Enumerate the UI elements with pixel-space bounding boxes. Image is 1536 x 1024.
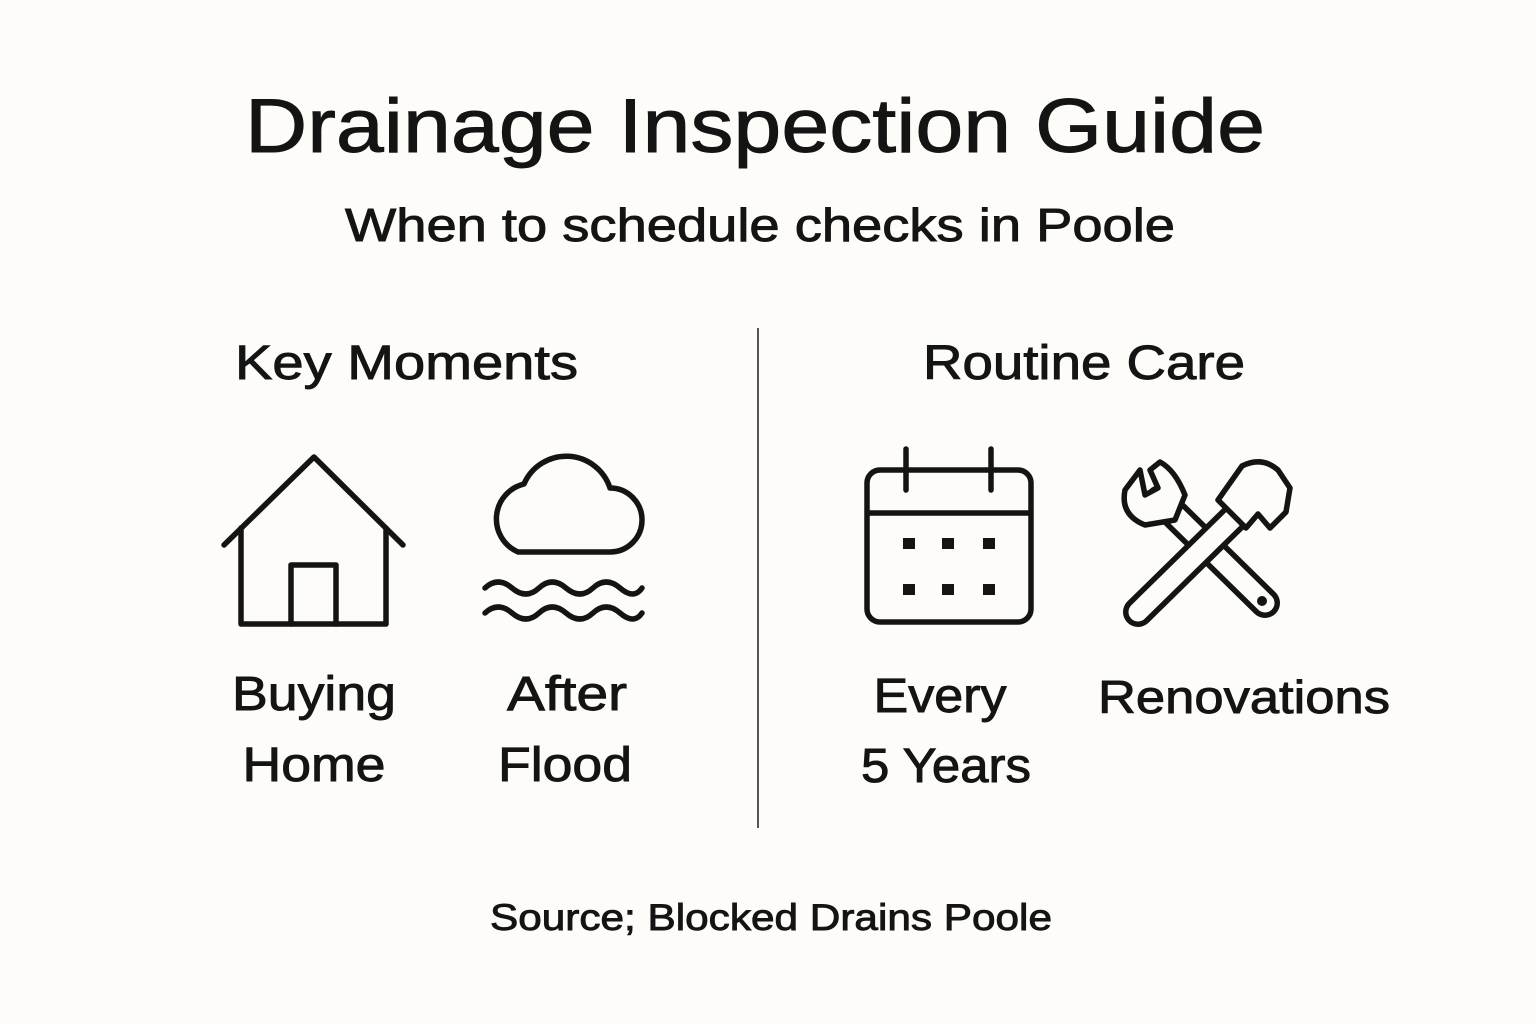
label: buying home: Home	[242, 739, 386, 792]
label: every 5 years	[861, 670, 1031, 793]
subtitle: When to schedule checks in Poole	[345, 199, 1175, 251]
label: renovations: Renovations	[1098, 671, 1390, 723]
title: Drainage Inspection Guide	[245, 84, 1265, 169]
source: Source; Blocked Drains Poole	[490, 897, 1052, 938]
label: after flood: After	[507, 668, 627, 721]
label: every 5 years: Every	[874, 670, 1006, 723]
heading: key moments: Key Moments	[235, 337, 578, 390]
label: every 5 years: 5 Years	[861, 740, 1031, 793]
icon: house	[224, 457, 403, 624]
icon: wrench and hammer	[1124, 462, 1290, 612]
heading: routine care: Routine Care	[923, 337, 1245, 390]
icon: calendar	[867, 449, 1031, 622]
icon: cloud and flood waves	[485, 456, 642, 619]
label: after flood	[498, 668, 632, 792]
label: buying home: Buying	[232, 668, 396, 721]
label: buying home	[232, 668, 396, 792]
label: after flood: Flood	[498, 739, 632, 792]
